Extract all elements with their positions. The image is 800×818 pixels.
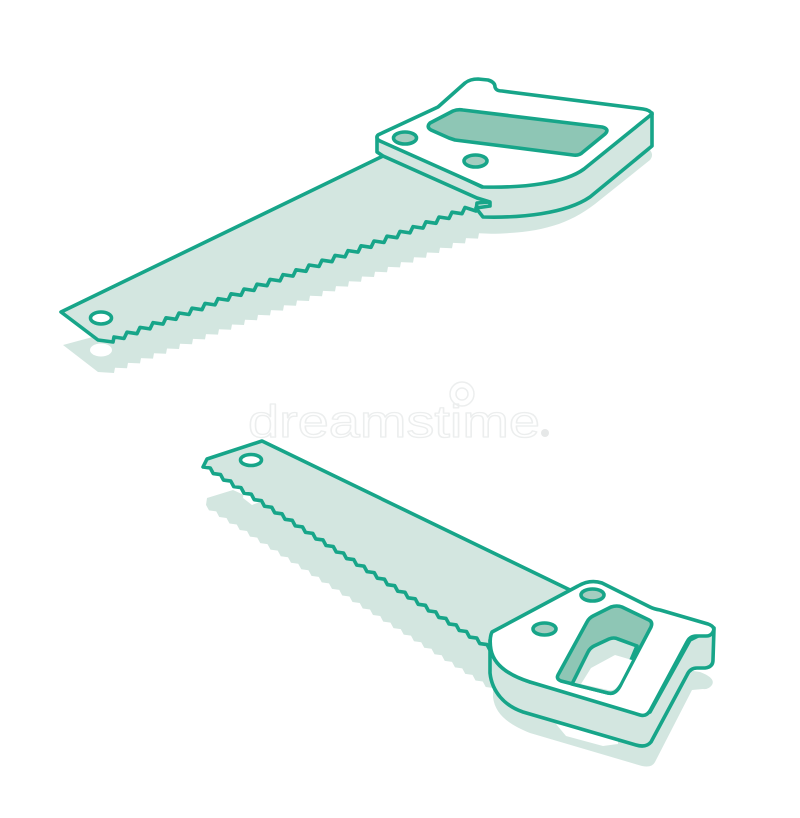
bottom saw window opening [572, 638, 637, 693]
top saw blade hole [90, 312, 112, 324]
bottom saw rivet left [533, 623, 556, 635]
bottom saw rivet top [581, 589, 604, 601]
top saw rivet right [464, 155, 487, 167]
top saw handle window [428, 110, 607, 155]
top saw rivet left [394, 132, 416, 144]
bottom saw handle window [557, 606, 652, 693]
top saw handle side [377, 113, 652, 217]
bottom saw [203, 441, 714, 766]
bottom saw window white opening [581, 655, 632, 690]
top saw [61, 79, 652, 373]
top saw shadow [63, 150, 652, 373]
top saw handle face [377, 79, 652, 187]
bottom saw blade hole [240, 454, 262, 466]
bottom saw handle side [490, 628, 714, 746]
bottom saw handle top face [490, 582, 714, 715]
bottom saw blade outline and teeth [203, 441, 570, 650]
top saw blade outline and teeth [61, 156, 490, 342]
watermark: dreamstime [248, 396, 540, 447]
bottom saw shadow [206, 490, 713, 766]
watermark [248, 382, 549, 447]
